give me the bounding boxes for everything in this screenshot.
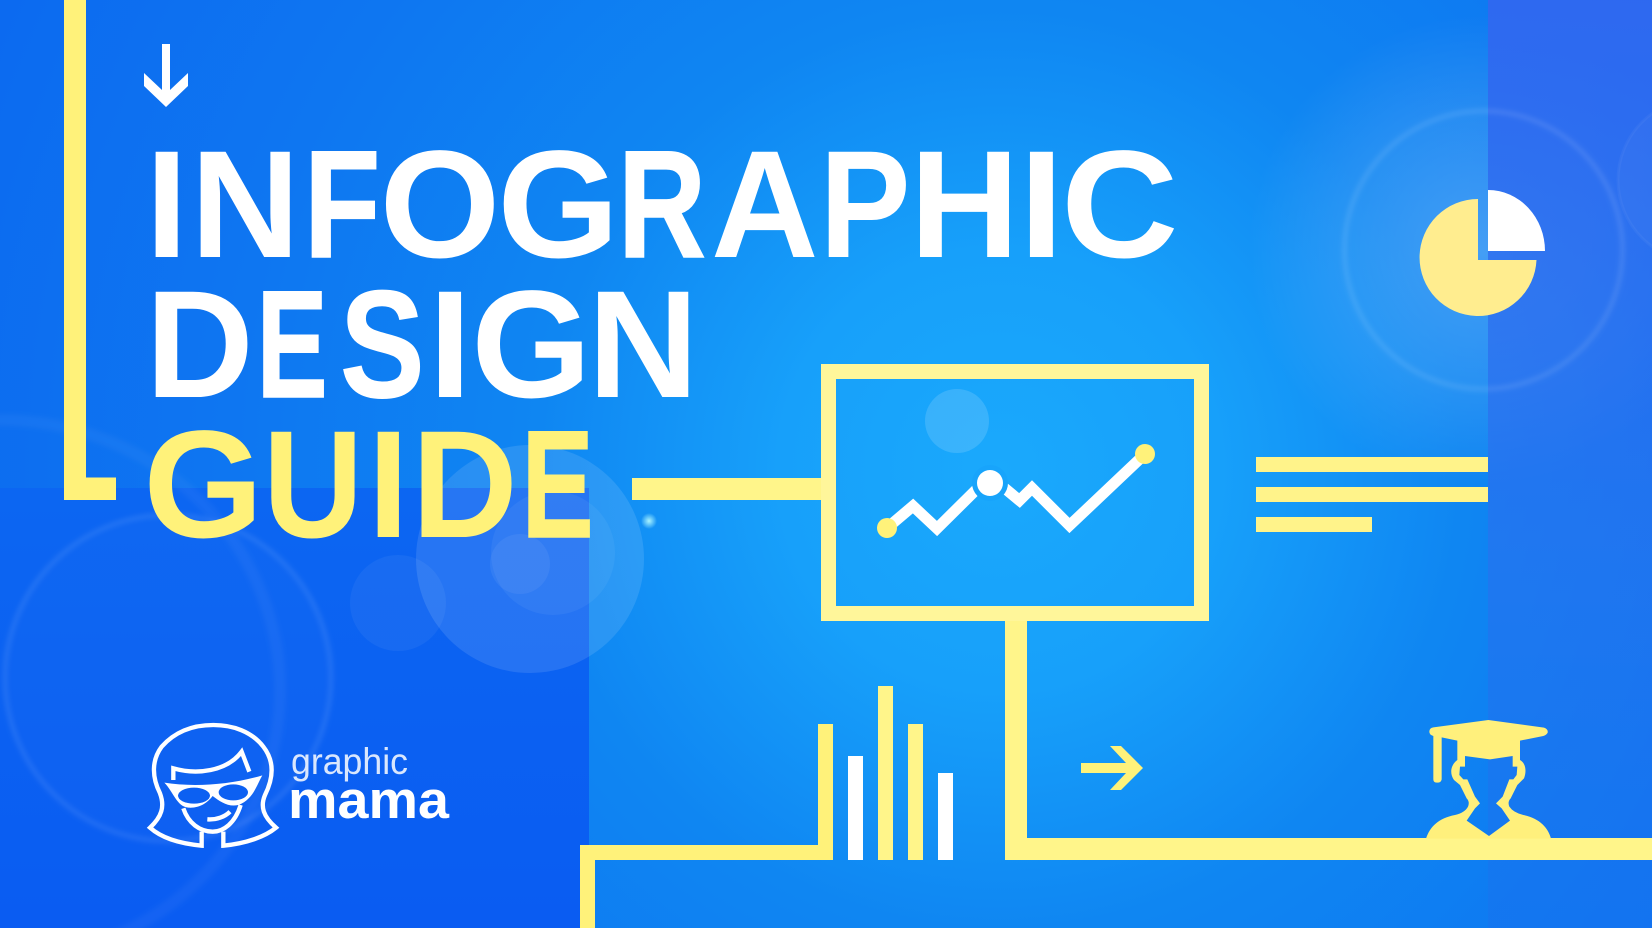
title line: DESIGN: G — [471, 259, 591, 430]
title line: INFOGRAPHIC: F — [304, 119, 380, 290]
wordmark: graphic: graphic — [291, 741, 408, 782]
wordmark: mama: mama — [288, 771, 450, 830]
icon: right arrow — [1081, 746, 1143, 790]
title line: INFOGRAPHIC: N — [190, 119, 300, 290]
left yellow bracket — [64, 0, 116, 500]
title line: GUIDE: U — [263, 399, 363, 570]
title line: INFOGRAPHIC: A — [711, 119, 818, 290]
title line: INFOGRAPHIC: H — [910, 119, 1019, 290]
title line: DESIGN: I — [429, 259, 471, 430]
title line: DESIGN: N — [588, 259, 699, 430]
panel: line chart — [821, 364, 1209, 621]
title line: DESIGN: D — [146, 259, 254, 430]
icon: woman face with glasses — [150, 725, 276, 846]
title line: GUIDE: D — [412, 399, 518, 570]
bar chart — [580, 686, 953, 928]
icon: pie chart — [1420, 190, 1545, 316]
title line: INFOGRAPHIC: P — [820, 119, 911, 290]
title line: DESIGN: S — [340, 259, 425, 430]
title line: INFOGRAPHIC: O — [380, 119, 500, 290]
title line: INFOGRAPHIC: I — [145, 119, 188, 290]
icon: down arrow — [144, 44, 188, 107]
logo: graphic mama — [150, 725, 450, 846]
title line: INFOGRAPHIC: R — [618, 119, 706, 290]
title — [143, 119, 1178, 570]
title line: GUIDE: E — [522, 399, 594, 570]
icon: graduate with cap — [1426, 720, 1551, 839]
connector: title to chart panel — [632, 478, 821, 500]
line chart — [877, 444, 1155, 538]
title line: INFOGRAPHIC: C — [1061, 119, 1178, 290]
connector: chart panel to bottom line — [1005, 621, 1652, 860]
title line: INFOGRAPHIC: I — [1019, 119, 1064, 290]
title line: DESIGN: E — [257, 259, 328, 430]
title line: GUIDE: G — [143, 399, 263, 570]
title line: INFOGRAPHIC: G — [497, 119, 619, 290]
text lines placeholder — [1256, 457, 1488, 532]
title line: GUIDE: I — [368, 399, 409, 570]
